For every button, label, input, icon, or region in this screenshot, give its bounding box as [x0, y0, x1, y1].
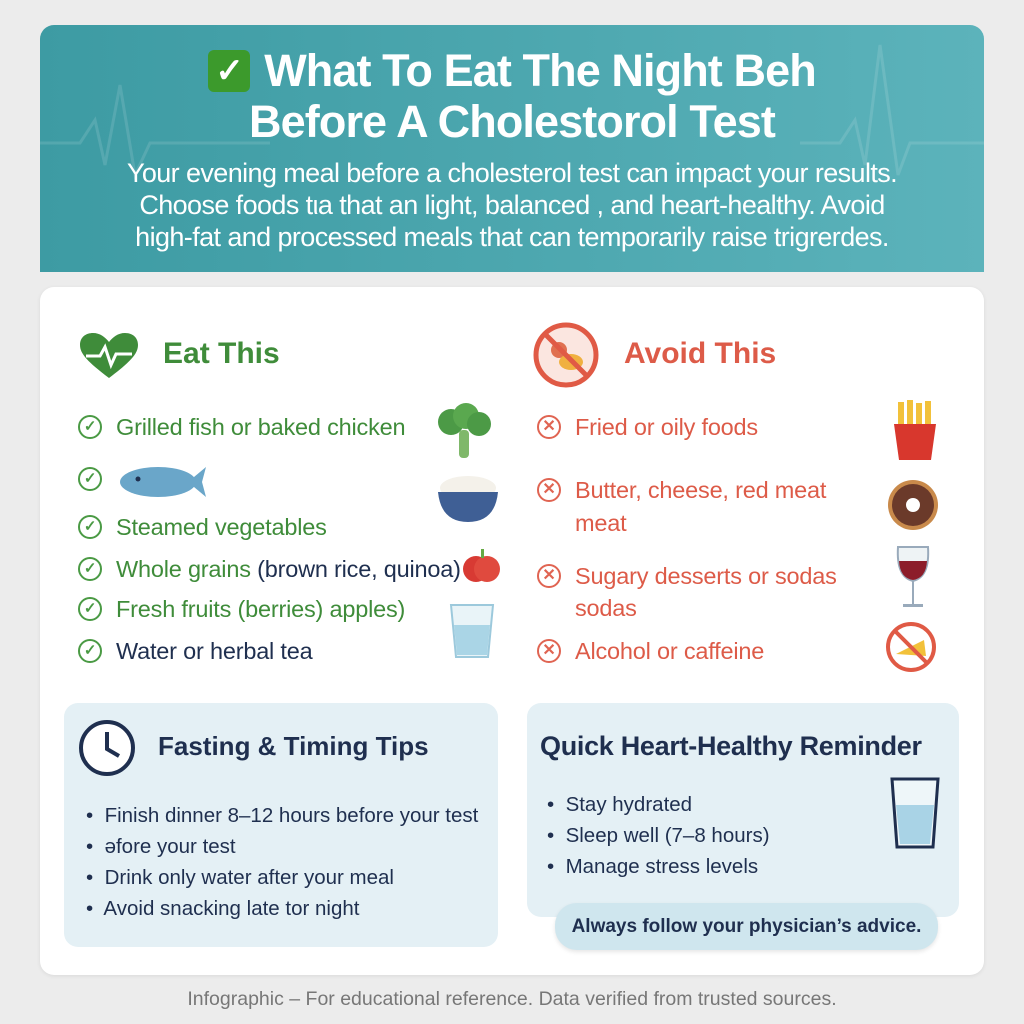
panel: eat this: Water or herbal tea — [116, 638, 312, 664]
heading: Fasting & Timing Tips — [158, 731, 429, 761]
panel: quick heart-healthy reminder — [527, 703, 959, 917]
callout: physician advice: Always follow your physician’s advice. — [572, 916, 921, 937]
panel: eat this: ✓ — [84, 518, 96, 535]
icon: clock — [79, 720, 135, 776]
panel: eat this: Fresh fruits (berries) apples) — [116, 596, 405, 622]
title: Before A Cholestorol Test — [249, 96, 775, 147]
panel: avoid this — [534, 322, 837, 664]
main card — [40, 287, 984, 975]
title: What To Eat The Night Beh — [264, 45, 816, 96]
panel: avoid this: Alcohol or caffeine — [575, 638, 764, 664]
panel: avoid this: ✕ — [542, 481, 556, 498]
list: ✕ — [542, 418, 556, 435]
panel: eat this: ✓ — [84, 560, 96, 577]
panel: fasting & timing tips — [64, 703, 498, 947]
callout: physician advice — [555, 903, 938, 950]
panel: avoid this: sodas — [575, 595, 637, 621]
panel: eat this: ✓ — [84, 600, 96, 617]
icon: no-food sign — [534, 322, 598, 388]
list: ✓ — [84, 418, 96, 435]
panel: eat this: ✓ — [84, 642, 96, 659]
icon: glass — [890, 778, 940, 848]
bullets — [86, 804, 478, 920]
subtitle text: high-fat and processed meals that can temporarily raise trigrerdes. — [135, 222, 889, 252]
list: Fried or oily foods — [575, 414, 758, 440]
panel: avoid this: ✕ — [542, 567, 556, 584]
icon: rice bowl — [438, 476, 498, 522]
panel: avoid this: Sugary desserts or sodas — [575, 563, 837, 589]
subtitle text: Your evening meal before a cholesterol test can impact your results. — [127, 158, 897, 188]
icon: fries — [894, 400, 936, 460]
footer: Infographic – For educational reference. Data verified from trusted sources. — [187, 988, 837, 1010]
panel: eat this: Steamed vegetables — [116, 514, 327, 540]
icon: water glass — [450, 604, 494, 658]
panel: eat this: ✓ — [84, 470, 96, 487]
icon: heart — [80, 333, 138, 378]
heading: Eat This — [163, 337, 280, 370]
heading: Quick Heart-Healthy Reminder — [540, 731, 922, 761]
bullets: • Stay hydrated — [547, 793, 692, 816]
icon: wine glass — [896, 546, 930, 607]
list: Grilled fish or baked chicken — [116, 414, 405, 440]
header banner — [40, 25, 984, 272]
bullets — [547, 793, 770, 878]
bullets: • Manage stress levels — [547, 855, 758, 878]
subtitle text — [127, 158, 897, 252]
icon: apple — [463, 549, 500, 582]
title: ✓ — [215, 52, 243, 90]
heading: Avoid This — [624, 337, 776, 370]
icon: donut — [888, 480, 938, 530]
panel: avoid this: meat — [575, 510, 626, 536]
title — [208, 45, 816, 147]
icon: no cheese — [886, 622, 936, 672]
bullets: • Finish dinner 8–12 hours before your test — [86, 804, 478, 827]
subtitle text: Choose foods tιa that an light, balanced , and heart-healthy. Avoid — [139, 190, 885, 220]
bullets: • Drink only water after your meal — [86, 866, 394, 889]
icon: fish — [120, 467, 206, 497]
panel: eat this — [78, 333, 461, 664]
bullets: • Avoid snacking late tor night — [86, 897, 359, 920]
bullets: • Sleep well (7–8 hours) — [547, 824, 770, 847]
bullets: • əfore your test — [86, 835, 236, 858]
panel: avoid this: Butter, cheese, red meat — [575, 477, 826, 503]
panel: eat this: Whole grains (brown rice, quinoa) — [116, 556, 461, 582]
icon: broccoli — [438, 403, 491, 458]
panel: avoid this: ✕ — [542, 642, 556, 659]
